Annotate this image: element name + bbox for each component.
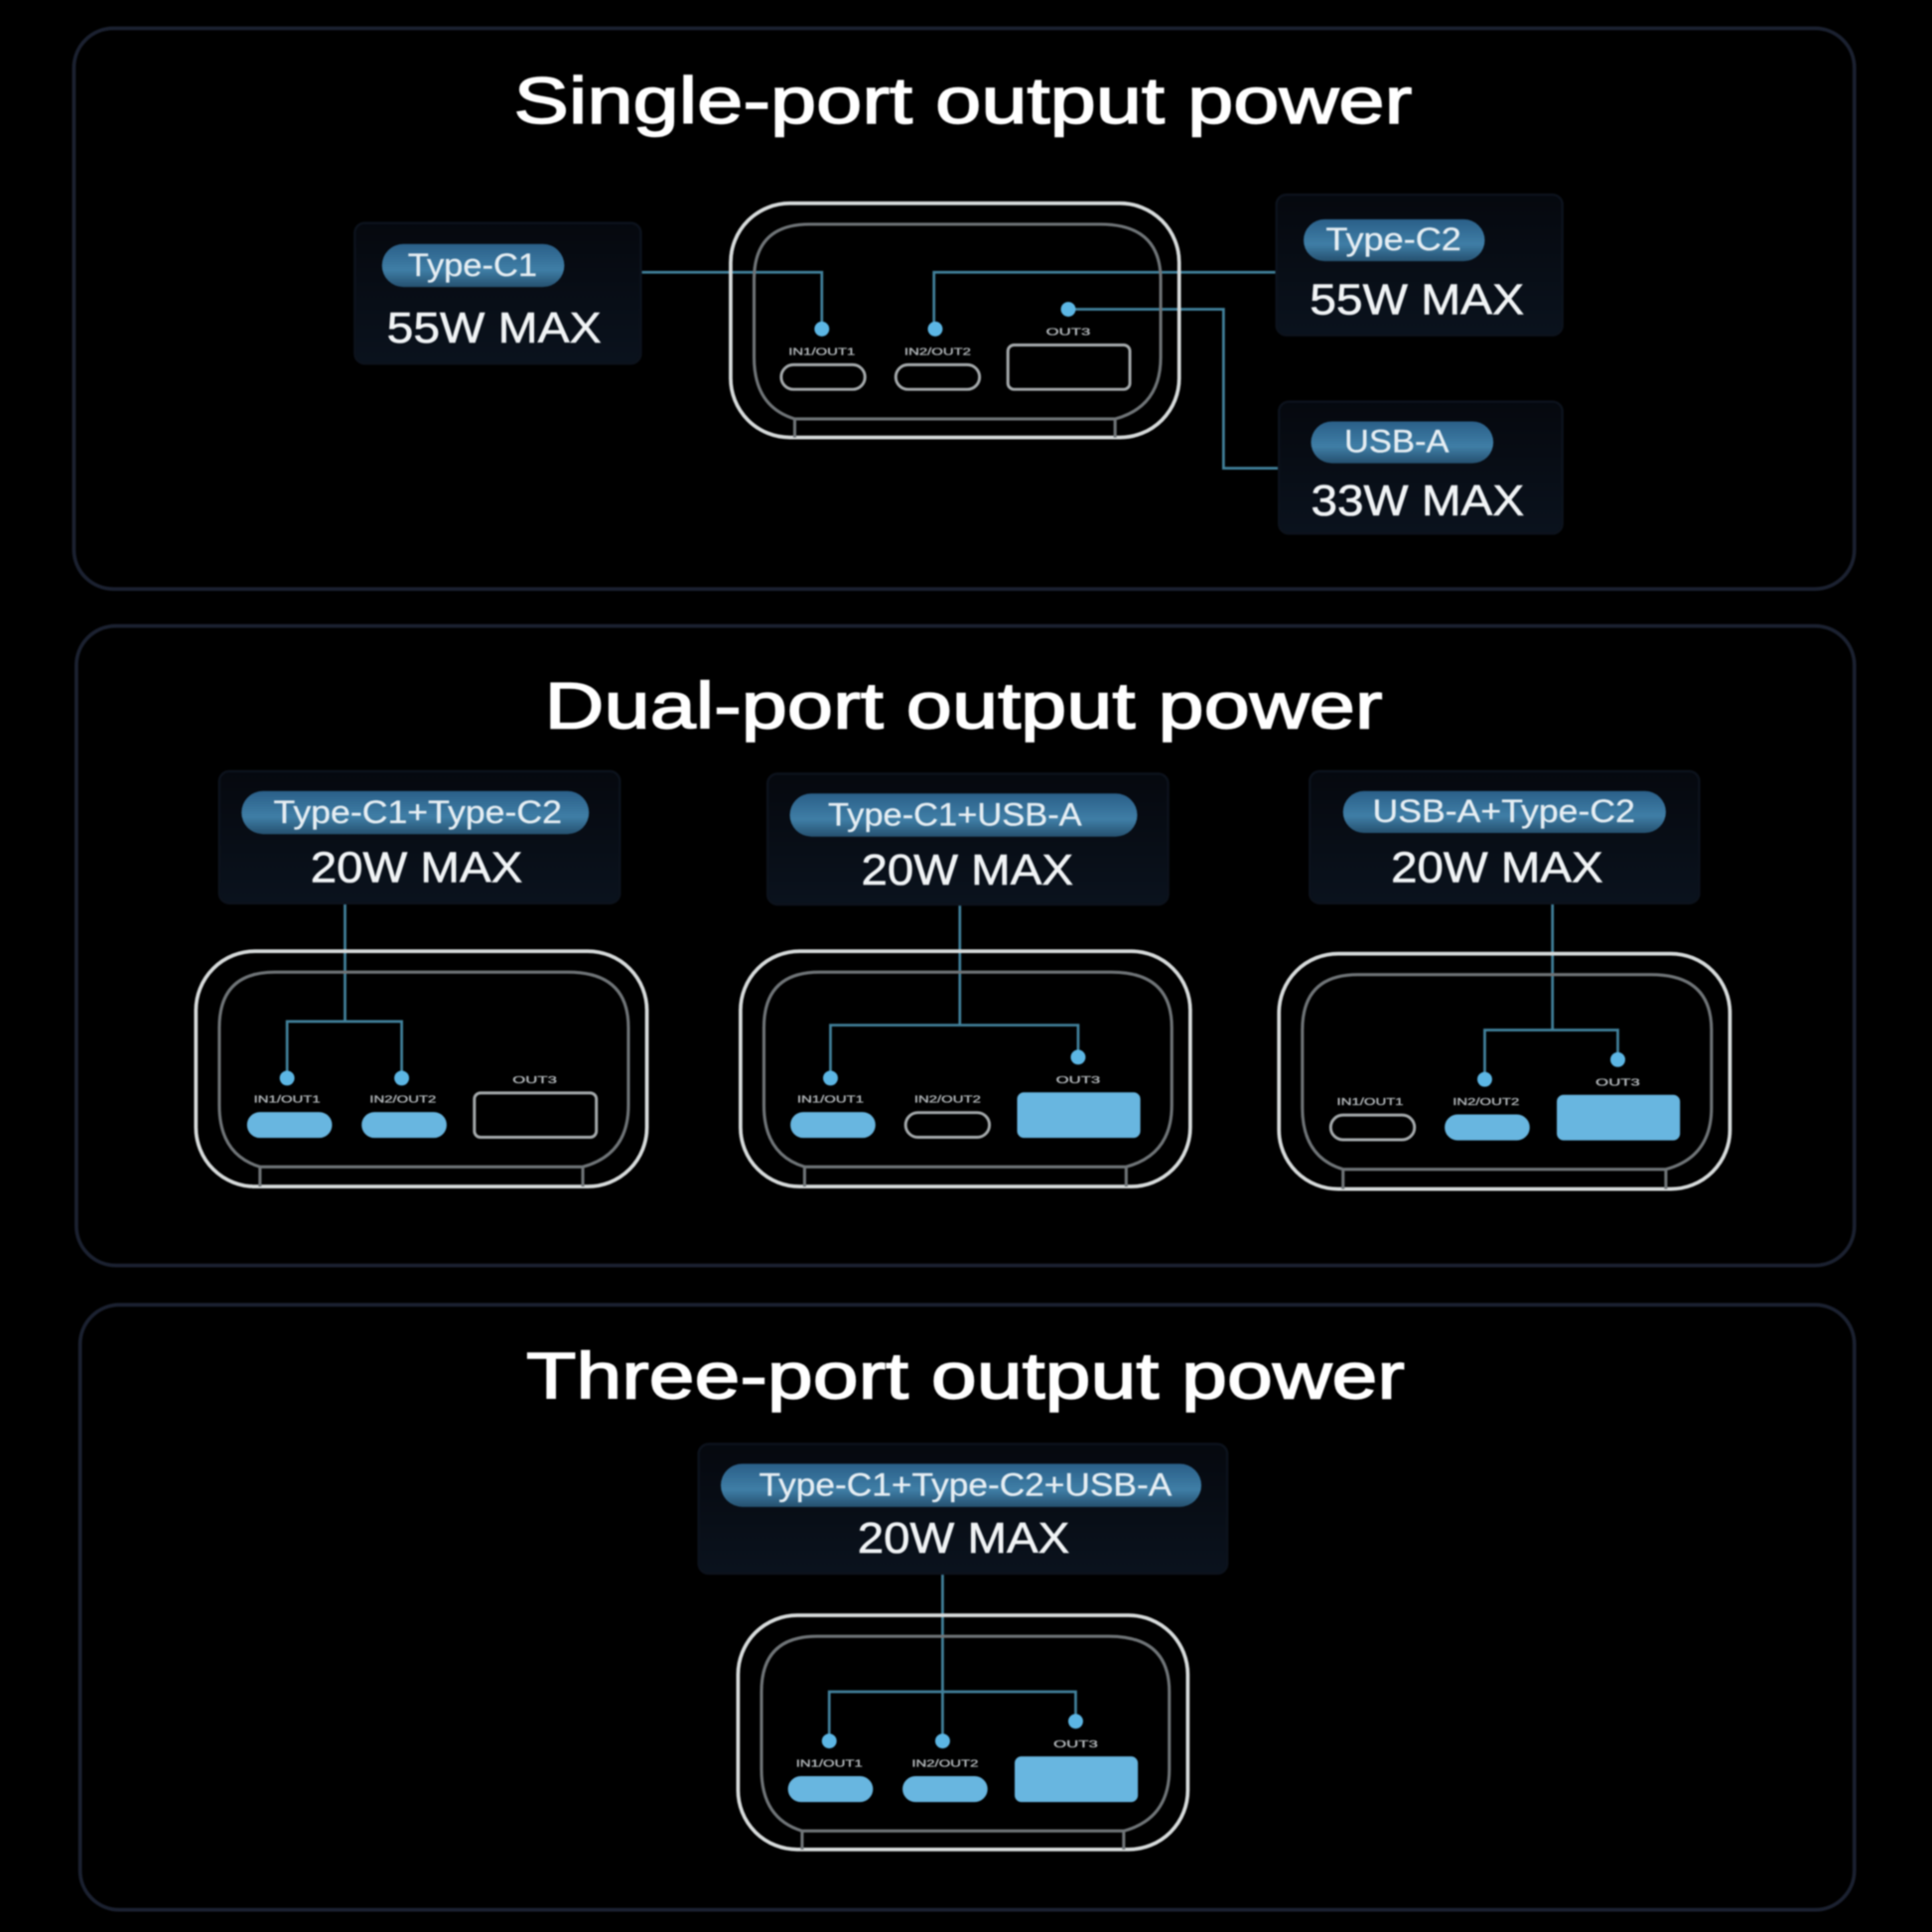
- device: power bank, no ports active: IN1/OUT1: [788, 345, 855, 357]
- device: C1 and C2 active: IN2/OUT2: [369, 1094, 437, 1106]
- connector: Type-C1 wire: [640, 272, 822, 329]
- device: all ports active: IN1/OUT1: [796, 1758, 863, 1770]
- device: power bank, no ports active: IN2/OUT2: [904, 345, 971, 357]
- callout: Type-C2 55W: Type-C2: [1325, 221, 1461, 257]
- callout: Type-C1+Type-C2+USB-A 20W: 20W MAX: [858, 1515, 1069, 1563]
- connector: USB-A wire: [1068, 310, 1279, 469]
- callout: Type-C1+USB-A 20W: 20W MAX: [862, 847, 1073, 895]
- callout: Type-C1 55W: 55W MAX: [387, 305, 602, 352]
- callout: Type-C1+Type-C2 20W: [219, 771, 620, 903]
- device: C2 and USB-A active: IN2/OUT2: [1452, 1096, 1519, 1108]
- panel: single-port output power: [73, 29, 1855, 589]
- device: C1 and USB-A active: [741, 951, 1190, 1186]
- callout: Type-C1+USB-A 20W: Type-C1+USB-A: [828, 797, 1082, 833]
- heading: single-port: Single-port output power: [514, 64, 1412, 137]
- callout: USB-A+Type-C2 20W: 20W MAX: [1391, 845, 1603, 893]
- callout: Type-C1+USB-A 20W: [767, 773, 1169, 904]
- callout: USB-A+Type-C2 20W: USB-A+Type-C2: [1373, 793, 1635, 829]
- device: all ports active: OUT3: [1053, 1738, 1098, 1750]
- device: C1 and USB-A active: IN2/OUT2: [914, 1094, 981, 1106]
- callout: Type-C1 55W: [354, 223, 640, 363]
- connector: C1+C2 wire: [287, 903, 402, 1078]
- device: power bank, no ports active: OUT3: [1046, 327, 1091, 339]
- callout: Type-C1+Type-C2 20W: Type-C1+Type-C2: [274, 794, 562, 830]
- device: power bank, no ports active: [731, 204, 1179, 438]
- callout: Type-C1+Type-C2+USB-A 20W: [699, 1445, 1227, 1574]
- device: C1 and C2 active: OUT3: [512, 1074, 557, 1086]
- heading: three-port: Three-port output power: [526, 1339, 1405, 1413]
- device: all ports active: IN2/OUT2: [911, 1758, 979, 1770]
- callout: Type-C1 55W: Type-C1: [408, 247, 537, 283]
- device: C1 and C2 active: [196, 951, 647, 1186]
- callout: USB-A 33W: USB-A: [1344, 423, 1449, 459]
- device: all ports active: [738, 1615, 1187, 1850]
- device: C1 and C2 active: IN1/OUT1: [254, 1094, 321, 1106]
- callout: USB-A+Type-C2 20W: [1310, 771, 1699, 903]
- device: C1 and USB-A active: OUT3: [1056, 1074, 1100, 1086]
- callout: Type-C2 55W: 55W MAX: [1310, 276, 1524, 324]
- device: C1 and USB-A active: IN1/OUT1: [797, 1094, 864, 1106]
- connector: C1+USB-A wire: [830, 904, 1078, 1078]
- connector: Type-C2 wire: [934, 272, 1277, 329]
- device: C2 and USB-A active: IN1/OUT1: [1337, 1096, 1404, 1108]
- heading: dual-port: Dual-port output power: [545, 668, 1382, 742]
- callout: USB-A 33W: 33W MAX: [1311, 478, 1524, 525]
- device: C2 and USB-A active: OUT3: [1595, 1076, 1640, 1088]
- connector: USB-A+C2 wire: [1484, 903, 1618, 1079]
- callout: Type-C2 55W: [1277, 195, 1563, 336]
- callout: Type-C1+Type-C2+USB-A 20W: Type-C1+Type-C2+USB-A: [759, 1467, 1173, 1503]
- connector: all ports wire: [829, 1574, 1075, 1741]
- callout: USB-A 33W: [1279, 402, 1563, 533]
- panel: dual-port output power: [76, 625, 1855, 1266]
- callout: Type-C1+Type-C2 20W: 20W MAX: [311, 845, 522, 893]
- device: C2 and USB-A active: [1279, 954, 1729, 1189]
- panel: three-port output power: [80, 1305, 1855, 1910]
